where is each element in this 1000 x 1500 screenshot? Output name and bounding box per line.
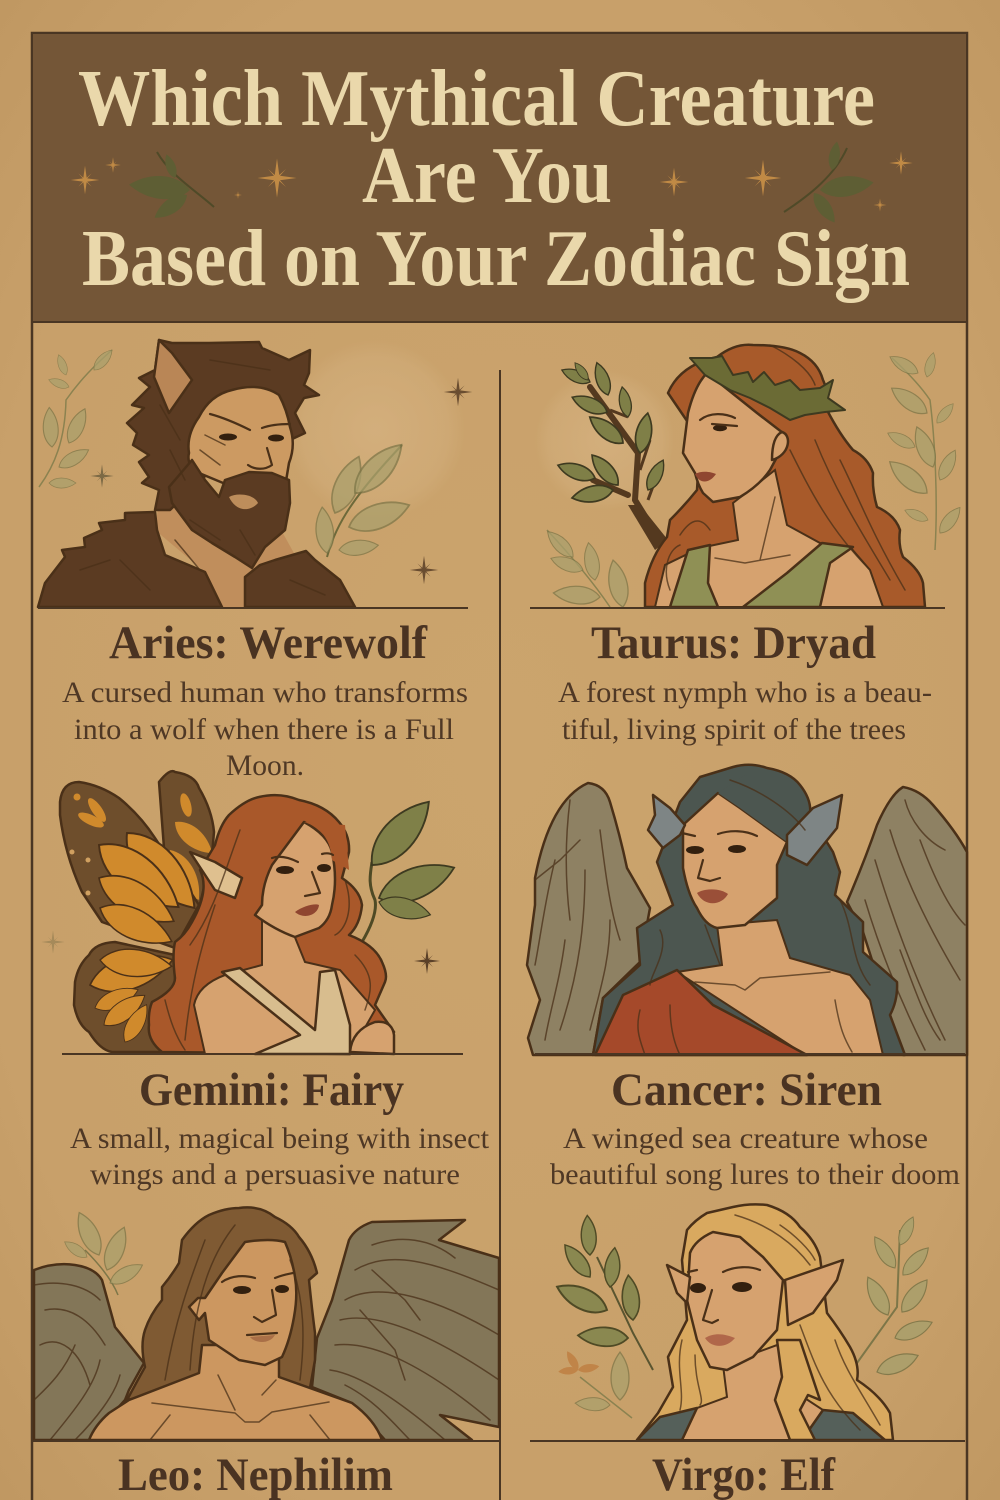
title: [78, 55, 910, 303]
illustration: nephilim: [34, 1207, 499, 1440]
illustration: werewolf: [38, 340, 472, 607]
heading: Gemini: Gemini: Fairy: [139, 1064, 404, 1116]
icon: right stars and sprig: [660, 141, 913, 226]
panel: Leo Nephilim: [32, 1207, 500, 1500]
description: Aries: Moon.: [226, 749, 304, 782]
title: Based on Your Zodiac Sign: [82, 215, 910, 303]
heading: Virgo: Virgo: Elf: [652, 1449, 836, 1500]
description: Cancer: A winged sea creature whose: [563, 1122, 928, 1155]
left wing: [527, 783, 650, 1055]
baseline rule: [530, 607, 945, 609]
left wing: [34, 1264, 144, 1440]
heading: Leo: Leo: Nephilim: [118, 1449, 393, 1500]
description: Taurus: tiful, living spirit of the trees: [562, 713, 906, 746]
baseline rule: [32, 1440, 500, 1442]
description: Taurus: A forest nymph who is a beau-: [558, 676, 932, 709]
illustration: dryad: [535, 345, 965, 609]
description: Aries: A cursed human who transforms: [62, 676, 468, 709]
description: Taurus: [558, 676, 932, 746]
panel: Taurus Dryad: [530, 345, 965, 746]
description: Gemini: A small, magical being with insect: [70, 1122, 490, 1155]
description: Cancer: [550, 1122, 960, 1191]
baseline rule: [38, 607, 468, 609]
description: Gemini: [70, 1122, 490, 1191]
description: Aries: into a wolf when there is a Full: [74, 713, 454, 746]
illustration: elf: [553, 1204, 935, 1440]
panel: Virgo Elf: [530, 1204, 965, 1500]
heading: Aries: Aries: Werewolf: [109, 617, 428, 669]
right wing: [847, 787, 967, 1055]
illustration: fairy: [41, 771, 460, 1054]
panel: Cancer Siren: [527, 765, 967, 1191]
column divider: [499, 370, 501, 1500]
right sprig: [857, 1214, 935, 1380]
description: Gemini: wings and a persuasive nature: [90, 1158, 460, 1191]
baseline rule: [535, 1053, 965, 1055]
baseline rule: [62, 1053, 463, 1055]
title banner: [32, 33, 967, 322]
description: Cancer: beautiful song lures to their doom: [550, 1158, 960, 1191]
baseline rule: [530, 1440, 965, 1442]
icon: left stars and sprig: [71, 152, 296, 224]
panel: Gemini Fairy: [41, 771, 490, 1191]
title: Which Mythical Creature: [78, 55, 875, 143]
panel: Aries Werewolf: [38, 340, 472, 782]
right wing: [312, 1220, 499, 1440]
title: Are You: [362, 132, 612, 220]
heading: Cancer: Cancer: Siren: [611, 1064, 882, 1116]
description: Aries: [62, 676, 468, 782]
butterfly wings: [60, 771, 218, 1052]
heading: Taurus: Taurus: Dryad: [591, 617, 876, 669]
illustration: siren: [527, 765, 967, 1055]
left sprig: [553, 1215, 653, 1418]
